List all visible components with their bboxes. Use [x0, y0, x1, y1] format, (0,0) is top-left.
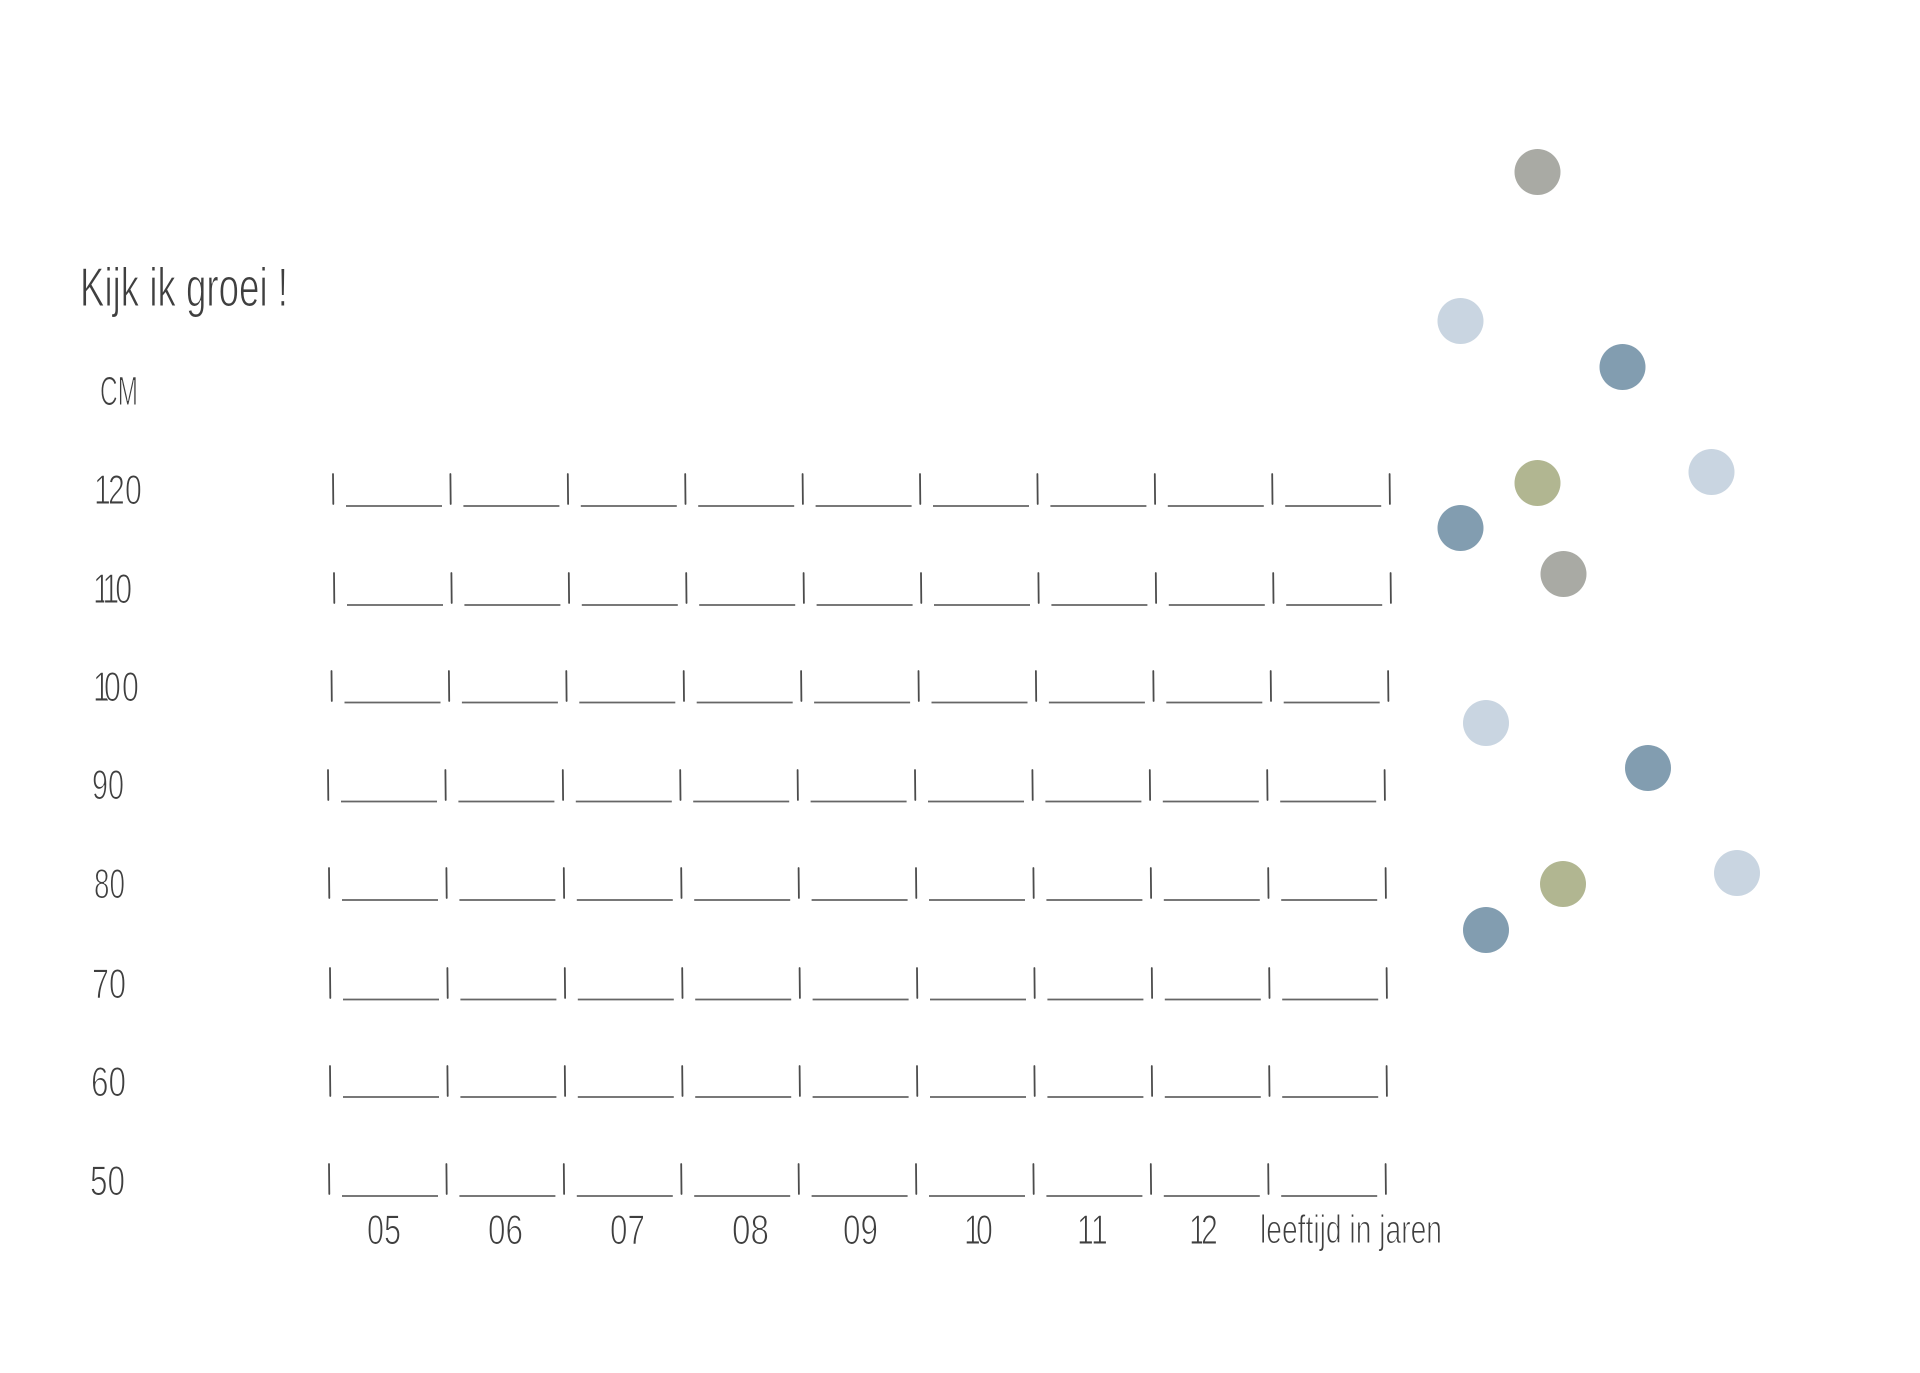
title: Kijk ik groei ! [80, 256, 288, 318]
x-axis age labels: 05 [367, 1206, 401, 1253]
y-axis height labels: 120 [94, 466, 142, 513]
y-axis height labels: 70 [92, 960, 126, 1007]
row 100 [332, 671, 1388, 702]
row 60 [330, 1066, 1387, 1097]
y-axis unit label: CM [100, 368, 138, 414]
x-axis age labels: 09 [843, 1206, 878, 1253]
x-axis age labels: 07 [610, 1206, 645, 1253]
y-axis height labels: 80 [94, 860, 125, 907]
x-axis age labels: 06 [488, 1206, 523, 1253]
y-axis height labels [90, 466, 142, 1204]
row 90 [328, 770, 1385, 802]
x-axis age labels: 11 [1077, 1206, 1108, 1253]
x-axis age labels: 12 [1189, 1206, 1218, 1253]
y-axis height labels: 90 [92, 761, 124, 808]
row 80 [329, 868, 1386, 900]
decorative dots: lower cluster [1463, 700, 1760, 953]
row 120 [333, 474, 1390, 506]
row 110 [334, 573, 1391, 605]
y-axis height labels: 60 [91, 1058, 126, 1105]
x-axis age labels [367, 1206, 1218, 1253]
y-axis height labels: 100 [93, 663, 139, 710]
x-axis age labels: 08 [732, 1206, 769, 1253]
decorative dots: upper cluster [1438, 149, 1734, 597]
row 70 [330, 968, 1387, 1000]
y-axis height labels: 110 [93, 565, 132, 612]
chart grid: rows of ticks and write-in lines [328, 474, 1391, 1196]
row 50 [329, 1164, 1386, 1196]
y-axis height labels: 50 [90, 1157, 125, 1204]
x-axis title: leeftijd in jaren [1260, 1208, 1442, 1252]
x-axis age labels: 10 [964, 1206, 993, 1253]
